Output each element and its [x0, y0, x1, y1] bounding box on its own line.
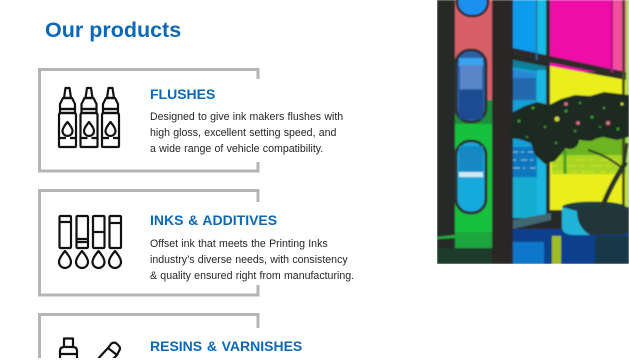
potted tree: foliage	[509, 92, 629, 164]
magenta pane	[549, 0, 625, 72]
potted tree: trunk and branches	[588, 143, 627, 208]
title: Our products	[45, 18, 181, 42]
text: flushes description: a wide range of vehicle compatibility.	[150, 143, 323, 155]
icon: resin jar and tube	[58, 337, 122, 358]
card frame: resins	[38, 313, 260, 358]
text: inks description: & quality ensured right from manufacturing.	[150, 270, 354, 282]
floor and sill	[437, 248, 492, 264]
heading: resins and varnishes: RESINS & VARNISHES	[150, 338, 302, 354]
photo: colourful stained glass windows and potted tree	[437, 0, 629, 264]
porthole windows	[457, 0, 488, 16]
panel: resins and varnishes	[38, 313, 302, 358]
icon: four ink cartridges with drops	[58, 214, 122, 270]
card frame: flushes	[38, 68, 260, 172]
text: flushes description: Designed to give ink makers flushes with	[150, 111, 343, 123]
potted tree: planter	[562, 202, 626, 212]
cyan lower pane	[513, 60, 549, 216]
icon: three ink bottles	[58, 86, 120, 148]
card frame: inks	[38, 189, 260, 296]
dark centre column	[492, 0, 513, 264]
text: flushes description	[150, 111, 343, 155]
panel: inks and additives	[38, 189, 354, 296]
yellow pane	[550, 66, 626, 210]
text: flushes description: high gloss, excellent setting speed, and	[150, 127, 336, 139]
dark left column	[437, 0, 456, 264]
heading: flushes: FLUSHES	[150, 86, 215, 102]
window frames	[513, 48, 626, 78]
red and green column	[455, 0, 492, 100]
text: inks description: Offset ink that meets the Printing Inks	[150, 238, 328, 250]
cyan upper pane	[513, 0, 549, 55]
panel: flushes	[38, 68, 343, 172]
heading: inks and additives: INKS & ADDITIVES	[150, 212, 277, 228]
text: inks description	[150, 238, 354, 282]
text: inks description: industry’s diverse needs, with consistency	[150, 254, 348, 266]
